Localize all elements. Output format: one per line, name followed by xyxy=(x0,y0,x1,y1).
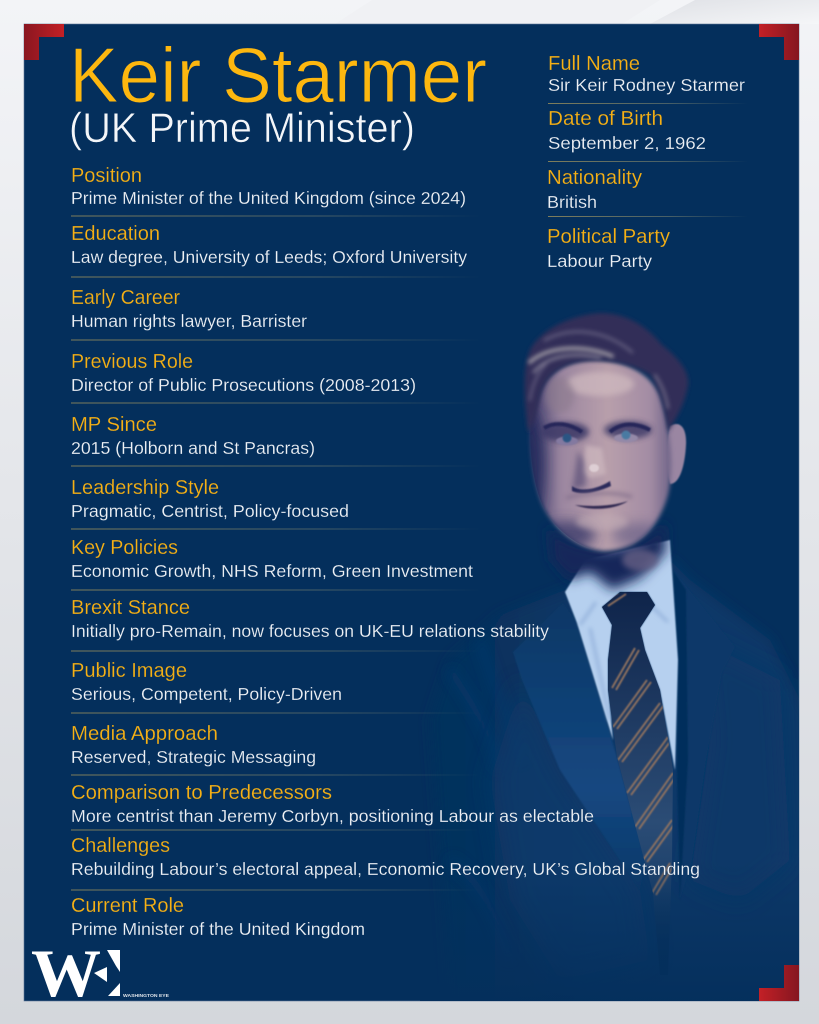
row: MP Since: 2015 (Holborn and St Pancras) xyxy=(71,438,315,458)
fact: Date of Birth xyxy=(548,108,706,153)
portrait: hair xyxy=(524,313,688,432)
portrait: lapel shadow xyxy=(673,570,688,900)
row: Comparison to Predecessors: Comparison to Predecessors xyxy=(71,782,332,804)
row: Early Career: Early Career xyxy=(71,287,180,309)
row: Media Approach xyxy=(71,723,316,767)
title: Keir Starmer xyxy=(69,31,487,119)
row: Education: Law degree, University of Leeds; Oxford University xyxy=(71,247,467,267)
logo: Washington Eye: WASHINGTON EYE xyxy=(123,993,169,998)
portrait: shirt shading xyxy=(580,600,668,720)
row: Key Policies: Economic Growth, NHS Reform, Green Investment xyxy=(71,561,473,581)
portrait: shirt xyxy=(565,540,678,770)
row: Key Policies: Key Policies xyxy=(71,537,178,559)
portrait: face xyxy=(530,360,671,551)
row: Public Image: Public Image xyxy=(71,660,187,682)
row: Challenges: Rebuilding Labour’s electoral appeal, Economic Recovery, UK’s Global Standing xyxy=(71,859,700,879)
portrait: left lapel xyxy=(514,629,644,863)
logo: Washington Eye xyxy=(31,935,169,1011)
row: Previous Role xyxy=(71,351,416,395)
portrait: hair highlights xyxy=(530,332,668,408)
row: Challenges xyxy=(71,835,700,879)
right column: key facts xyxy=(547,53,748,271)
fact: Full Name: Full Name xyxy=(548,53,640,75)
row: Previous Role: Director of Public Prosecutions (2008-2013) xyxy=(71,375,416,395)
portrait: left chest xyxy=(500,720,535,889)
row: Public Image: Serious, Competent, Policy-Driven xyxy=(71,684,342,704)
portrait: neck light xyxy=(622,549,658,571)
row: Early Career: Human rights lawyer, Barrister xyxy=(71,311,307,331)
fact: Political Party xyxy=(547,226,670,271)
fact: Date of Birth: Date of Birth xyxy=(548,108,663,130)
fact: Political Party: Political Party xyxy=(547,226,670,248)
corner: top right xyxy=(759,24,799,60)
row: Previous Role: Previous Role xyxy=(71,351,193,373)
fact: Full Name xyxy=(548,53,745,95)
row: Leadership Style: Leadership Style xyxy=(71,477,219,499)
row: MP Since xyxy=(71,414,315,458)
portrait of Keir Starmer xyxy=(420,313,810,1010)
fact: Nationality: British xyxy=(547,192,597,212)
logo: Washington Eye: W xyxy=(31,935,101,1011)
row: Position xyxy=(71,165,466,208)
row: Education xyxy=(71,223,467,267)
portrait: neck xyxy=(548,520,666,590)
row: Current Role: Prime Minister of the United Kingdom xyxy=(71,919,365,939)
portrait: jacket xyxy=(495,564,799,965)
portrait: bottom fade xyxy=(420,870,799,1001)
corner: bottom right xyxy=(759,965,799,1001)
row: Challenges: Challenges xyxy=(71,835,170,857)
left column: profile rows xyxy=(71,165,700,939)
fact: Full Name: Sir Keir Rodney Starmer xyxy=(548,75,745,95)
corner: top left xyxy=(24,24,64,60)
row: Position: Prime Minister of the United Kingdom (since 2024) xyxy=(71,188,466,208)
row: Leadership Style xyxy=(71,477,349,521)
portrait: tie xyxy=(602,592,673,900)
row: Early Career xyxy=(71,287,307,331)
row: Brexit Stance: Brexit Stance xyxy=(71,597,190,619)
row: Current Role: Current Role xyxy=(71,895,184,917)
subtitle: (UK Prime Minister) xyxy=(69,104,415,151)
fact: Nationality: Nationality xyxy=(547,167,642,189)
fact: Date of Birth: September 2, 1962 xyxy=(548,133,706,153)
row: Education: Education xyxy=(71,223,160,245)
row: Comparison to Predecessors: More centrist than Jeremy Corbyn, positioning Labour as electable xyxy=(71,806,594,826)
fact: Political Party: Labour Party xyxy=(547,251,652,271)
portrait: facial features xyxy=(530,371,654,548)
portrait: right lapel xyxy=(709,662,728,742)
row: Leadership Style: Pragmatic, Centrist, Policy-focused xyxy=(71,501,349,521)
row: Current Role xyxy=(71,895,365,939)
row: Public Image xyxy=(71,660,342,704)
row: Position: Position xyxy=(71,165,142,187)
row: Media Approach: Reserved, Strategic Messaging xyxy=(71,747,316,767)
row: Key Policies xyxy=(71,537,473,581)
portrait: ear xyxy=(667,424,686,484)
row: Comparison to Predecessors xyxy=(71,782,594,826)
row: Brexit Stance: Initially pro-Remain, now focuses on UK-EU relations stability xyxy=(71,621,549,641)
fact: Nationality xyxy=(547,167,642,212)
portrait: right jacket panel xyxy=(690,640,790,900)
row: MP Since: MP Since xyxy=(71,414,157,436)
row: Brexit Stance xyxy=(71,597,549,641)
portrait: left sleeve folds xyxy=(450,640,520,960)
row: Media Approach: Media Approach xyxy=(71,723,218,745)
